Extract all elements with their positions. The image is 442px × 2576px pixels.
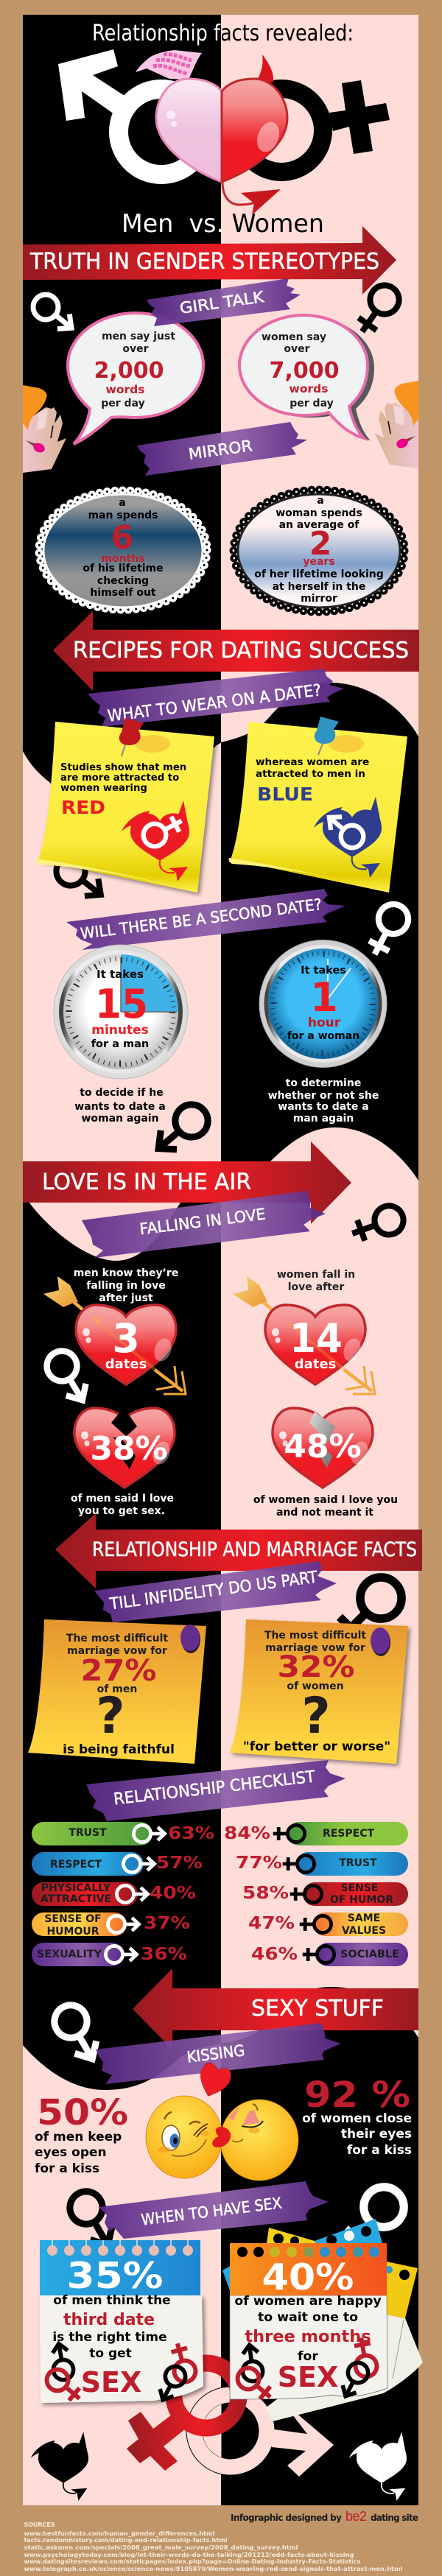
calendar: 35% of men: third date	[63, 2311, 155, 2329]
row: same values 47%: SAME	[348, 1912, 380, 1924]
mirror: woman	[234, 490, 404, 612]
footer: sources: www.psychologytoday.com/blog/let-their-words-do-the-talking/201212/odd-facts-about-kissing	[24, 2552, 354, 2558]
mirror: woman: an average of	[279, 519, 359, 531]
ribbon: mirror	[137, 422, 307, 476]
speech bubble: women: 7,000	[270, 358, 339, 384]
mirror: man: of his lifetime	[83, 563, 164, 574]
ribbon: will there be a second date: WILL THERE BE A SECOND DATE?	[80, 895, 323, 943]
arrow banner: sexy stuff: SEXY STUFF	[251, 1996, 384, 2021]
icon: female symbol large	[326, 1569, 410, 1653]
row: sense of humour 37%: SENSE OF	[44, 1913, 102, 1925]
footer: sources	[24, 2521, 403, 2572]
title: Relationship facts revealed:	[92, 21, 354, 46]
text: to determine whether: wants to date a	[278, 1101, 369, 1113]
stat: 50% of men: of men keep	[35, 2130, 122, 2144]
ribbon: till infidelity do us part: TILL INFIDELITY DO US PART	[108, 1569, 319, 1614]
speech bubble: men: over	[122, 343, 149, 355]
calendar: 35% of men: is the right time	[52, 2330, 167, 2345]
calendar: 40% of women: to wait one to	[258, 2310, 358, 2325]
icon: female symbol right	[351, 280, 404, 340]
arrow banner: recipes for dating success	[53, 611, 419, 691]
checklist: men	[32, 1822, 214, 1966]
icon: woman's face right	[375, 381, 418, 468]
stat: 92% of women: their eyes	[341, 2127, 412, 2142]
speech bubble: men: per day	[101, 398, 145, 409]
calendar: 35% of men	[40, 2240, 203, 2407]
mirror: man: months	[101, 553, 145, 565]
sticky note: 27% of men: marriage vow for	[67, 1645, 167, 1657]
row: respect 84%: 84%	[224, 1823, 270, 1843]
row: physically attractive 40%: 40%	[150, 1882, 196, 1903]
arrow banner: truth in gender stereotypes: TRUTH IN GENDER STEREOTYPES	[29, 249, 379, 275]
text: of men said I love you	[71, 1493, 174, 1517]
arrow banner: truth in gender stereotypes	[23, 226, 396, 295]
stat: 92% of women: of women close	[302, 2111, 412, 2126]
icon: female symbol white behind ribbon	[334, 2179, 412, 2262]
heart: 14 dates: 14	[290, 1315, 343, 1362]
footer: sources: facts.randomhistory.com/dating-and-relationship-facts.html	[24, 2537, 228, 2544]
speech bubble: women: women say	[262, 331, 326, 343]
clock: man 15 minutes	[54, 945, 188, 1079]
heart: 3 dates: 3	[112, 1315, 140, 1362]
stat: 50% of men: eyes open	[35, 2145, 107, 2160]
row: respect 57%: RESPECT	[50, 1859, 102, 1871]
arrow banner: love is in the air	[23, 1141, 351, 1224]
row: physically attractive 40%: PHYSICALLY	[41, 1882, 111, 1894]
row: sexuality 36%: SEXUALITY	[37, 1949, 102, 1960]
icon: angel and devil heart	[136, 50, 287, 215]
text: of women said I love you: of women said I love you	[253, 1494, 398, 1506]
row: sociable 46%: SOCIABLE	[340, 1949, 399, 1960]
mirror: man	[39, 490, 207, 610]
calendar: 35% of men: to get	[89, 2346, 132, 2361]
stat: 50% of men: 50%	[37, 2092, 128, 2133]
text: to determine whether: man again	[293, 1113, 354, 1125]
row: sense of humor 58%: SENSE	[340, 1882, 379, 1894]
ribbon: girl talk: GIRL TALK	[178, 288, 266, 317]
heart: 14 dates	[233, 1276, 375, 1394]
icon: white devil heart	[349, 2432, 407, 2501]
sticky note: 32% of women: ?	[301, 1687, 331, 1745]
icon: woman's face left	[23, 385, 66, 473]
calendar: 35% of men: 35%	[66, 2255, 164, 2297]
ribbon: relationship checklist	[86, 1760, 345, 1821]
sticky note: red: are more attracted to	[60, 773, 179, 784]
footer: sources: static.askmen.com/specials/2008_great_male_survey/2008_dating_survey.html	[24, 2544, 298, 2551]
speech bubble: men: words	[106, 383, 144, 396]
clock: man 15 minutes: It takes	[97, 968, 144, 981]
text: men know they're falling	[74, 1267, 178, 1304]
footer: sources: www.bestfunfacts.com/human_gender_differences.html	[24, 2530, 215, 2537]
icon: kissing smileys	[146, 2061, 298, 2181]
icon: male symbol behind note	[51, 851, 110, 906]
text: to determine whether: to determine	[286, 1077, 361, 1089]
footer: credit	[231, 2509, 418, 2524]
sticky note: 27% of men: is being faithful	[63, 1742, 175, 1757]
sticky note: red: RED	[61, 797, 105, 818]
ribbon: falling in love: FALLING IN LOVE	[138, 1206, 267, 1238]
icon: female symbol white	[362, 899, 413, 961]
icon: male symbol black behind ribbon	[64, 2186, 122, 2253]
text: of women said I love you: and not meant it	[276, 1507, 373, 1518]
stat: 92% of women: 92 %	[304, 2074, 410, 2116]
speech bubble: women	[239, 315, 374, 440]
footer: credit: Infographic designed by	[231, 2513, 342, 2523]
calendar: 40% of women: of women are happy	[234, 2294, 382, 2309]
calendar: 40% of women: for	[298, 2349, 318, 2364]
mirror: woman: mirror	[301, 593, 337, 605]
heart: broken 38%	[74, 1408, 175, 1488]
sticky note: 27% of men: 27%	[81, 1654, 156, 1688]
mirror: woman: at herself in the	[273, 581, 365, 593]
sticky note: 32% of women: 32%	[277, 1650, 355, 1684]
icon: big female symbol	[240, 80, 390, 172]
ribbon: relationship checklist: RELATIONSHIP CHECKLIST	[113, 1767, 317, 1809]
row: physically attractive 40%	[32, 1882, 196, 1906]
row: trust 63%: TRUST	[69, 1827, 107, 1839]
row: trust 77%	[236, 1852, 408, 1876]
calendar: 35% of men: of men think the	[53, 2293, 171, 2308]
row: same values 47%	[248, 1912, 408, 1937]
ribbon: mirror: MIRROR	[187, 437, 253, 463]
row: sense of humour 37%: HUMOUR	[46, 1926, 99, 1938]
heart: broken 38%: 38%	[90, 1430, 168, 1468]
text: of men said I love you: of men said I love	[71, 1493, 174, 1505]
row: respect 57%: 57%	[156, 1852, 203, 1873]
clock: man 15 minutes: for a man	[91, 1038, 149, 1050]
row: same values 47%: 47%	[248, 1912, 295, 1933]
icon: male symbol white	[41, 1345, 95, 1408]
mirror: man: 6	[111, 519, 133, 557]
row: same values 47%: VALUES	[342, 1925, 386, 1937]
row: respect 84%: RESPECT	[323, 1828, 374, 1840]
footer: sources: www.telegraph.co.uk/science/science-news/9105879/Women-wearing-red-send-signals-that-attract-men.html	[24, 2566, 403, 2572]
sticky note: 32% of women: marriage vow for	[265, 1642, 365, 1654]
heart: 3 dates	[43, 1276, 186, 1394]
clock: woman 1 hour: hour	[308, 1016, 341, 1030]
calendar: 40% of women	[230, 2243, 387, 2405]
text: to decide if he wants to date: woman again	[81, 1113, 159, 1125]
sticky note: 27% of men: ?	[96, 1687, 125, 1745]
row: trust 77%: 77%	[236, 1852, 282, 1873]
speech bubble: men	[68, 313, 203, 444]
ribbon: kissing: KISSING	[186, 2041, 246, 2066]
footer: sources: SOURCES	[24, 2521, 55, 2528]
speech bubble: women: over	[284, 343, 310, 355]
text: to decide if he wants to date	[74, 1087, 166, 1125]
text: of women said I love you	[253, 1494, 398, 1518]
sticky note: 32% of women: The most difficult	[264, 1630, 366, 1641]
row: sense of humor 58%	[242, 1882, 408, 1906]
footer: credit: dating site	[371, 2513, 418, 2523]
heart: broken 48%	[273, 1408, 373, 1488]
subtitle: men vs women: Men vs. Women	[122, 209, 324, 239]
icon: male symbol black	[148, 1098, 214, 1161]
sticky note: 27% of men: The most difficult	[66, 1633, 168, 1644]
arrow banner: sexy stuff	[133, 1968, 418, 2049]
row: sense of humour 37%: 37%	[144, 1912, 190, 1933]
ribbon: what to wear on a date: WHAT TO WEAR ON A DATE?	[107, 681, 322, 726]
icon: big pink male symbol	[186, 2387, 334, 2477]
mirror: man: himself out	[90, 587, 156, 599]
text: to decide if he wants to date: to decide if he	[80, 1087, 164, 1099]
speech bubble: women: words	[290, 382, 328, 395]
mirror: woman: woman spends	[276, 507, 362, 519]
row: trust 63%	[32, 1822, 214, 1845]
row: trust 63%: 63%	[168, 1823, 214, 1843]
text: men know they're falling: after just	[99, 1292, 153, 1304]
ribbon: falling in love	[82, 1191, 326, 1258]
ribbon: when to have sex: WHEN TO HAVE SEX	[140, 2194, 283, 2229]
sticky note: blue: attracted to men in	[256, 768, 365, 780]
text: men know they're falling: men know they’re	[74, 1267, 178, 1279]
row: respect 57%	[32, 1852, 203, 1876]
speech bubble: women: per day	[290, 398, 334, 409]
mirror: man: checking	[97, 575, 149, 587]
sticky note: 32% of women	[230, 1619, 408, 1764]
speech bubble: men: 2,000	[94, 358, 164, 384]
row: sociable 46%	[251, 1943, 408, 1966]
sticky note: 32% of women: of women	[287, 1681, 344, 1692]
sticky note: blue: BLUE	[257, 784, 313, 805]
sticky note: red: women wearing	[60, 783, 147, 794]
text: women fall in love after: love after	[288, 1281, 344, 1293]
text: of men said I love you: you to get sex.	[78, 1505, 165, 1517]
calendar: 40% of women: SEX	[278, 2361, 338, 2393]
clock: man 15 minutes: minutes	[91, 1023, 149, 1038]
text: women fall in love after	[277, 1269, 355, 1293]
icon: big red female symbol	[127, 2363, 239, 2471]
ribbon: kissing	[96, 2023, 341, 2084]
icon: female symbol black	[348, 1202, 407, 1247]
row: sense of humour 37%	[32, 1912, 190, 1938]
sticky note: 27% of men	[28, 1619, 206, 1764]
icon: male symbol white	[49, 1999, 106, 2067]
calendar: 40% of women: 40%	[262, 2256, 354, 2298]
stat: 50% of men: for a kiss	[35, 2161, 99, 2176]
heart: 14 dates: dates	[295, 1356, 336, 1372]
calendar: 40% of women: three months	[245, 2327, 371, 2346]
clock: man 15 minutes: 15	[95, 981, 148, 1027]
clock: woman 1 hour: 1	[310, 974, 338, 1021]
row: physically attractive 40%: ATTRACTIVE	[41, 1893, 111, 1905]
checklist: women	[224, 1822, 408, 1966]
arrow banner: love is in the air: LOVE IS IN THE AIR	[42, 1169, 251, 1195]
speech bubble: men: men say just	[102, 331, 175, 342]
mirror: woman: 2	[309, 525, 332, 563]
icon: black devil heart	[31, 2432, 88, 2501]
arrow banner: relationship and marriage facts	[55, 1513, 422, 1588]
mirror: woman: years	[303, 556, 335, 568]
clock: woman 1 hour: It takes	[301, 965, 346, 976]
footer: credit: be2	[345, 2509, 367, 2524]
row: trust 77%: TRUST	[339, 1857, 377, 1869]
text: to decide if he wants to date: wants to date a	[74, 1101, 166, 1113]
mirror: woman: of her lifetime looking	[254, 569, 384, 580]
heart: 3 dates: dates	[105, 1356, 147, 1372]
sticky note: blue: whereas women are	[256, 756, 369, 768]
mirror: man: man spends	[88, 510, 158, 521]
footer: sources: www.datingsitesreviews.com/staticpages/index.php?page=Online-Dating-Industry-Facts-Statistics	[24, 2558, 361, 2565]
ribbon: girl talk	[147, 278, 301, 326]
sticky note: red	[37, 718, 214, 893]
mirror: man: a	[119, 497, 126, 509]
stat: 50% of men	[35, 2092, 128, 2176]
heart: broken 48%: 48%	[284, 1428, 362, 1465]
text: to determine whether	[268, 1077, 379, 1125]
calendar pages behind	[222, 2219, 423, 2421]
sticky note: blue	[228, 717, 407, 893]
calendar: 35% of men: SEX	[81, 2366, 141, 2399]
text: women fall in love after: women fall in	[277, 1269, 355, 1281]
clock: woman 1 hour: for a woman	[287, 1030, 359, 1042]
icon: male symbol left	[28, 289, 80, 338]
icon: big male symbol	[58, 49, 204, 175]
clock: woman 1 hour	[259, 940, 387, 1068]
text: to determine whether: whether or not she	[268, 1090, 379, 1102]
text: men know they're falling: falling in love	[86, 1280, 166, 1292]
ribbon: when to have sex	[99, 2181, 329, 2239]
stat: 92% of women	[302, 2074, 412, 2158]
row: sense of humor 58%: OF HUMOR	[330, 1894, 393, 1906]
row: respect 84%	[224, 1822, 408, 1845]
row: sexuality 36%: 36%	[141, 1943, 187, 1964]
row: sociable 46%: 46%	[251, 1943, 298, 1964]
row: sexuality 36%	[32, 1943, 187, 1966]
sticky note: 27% of men: of men	[97, 1683, 137, 1695]
sticky note: 32% of women: "for better or worse"	[243, 1739, 390, 1754]
mirror: woman: a	[317, 495, 324, 507]
row: sense of humor 58%: 58%	[242, 1882, 289, 1903]
arrow banner: recipes for dating success: RECIPES FOR DATING SUCCESS	[73, 638, 409, 664]
stat: 92% of women: for a kiss	[347, 2143, 412, 2158]
sticky note: red: Studies show that men	[60, 762, 186, 773]
